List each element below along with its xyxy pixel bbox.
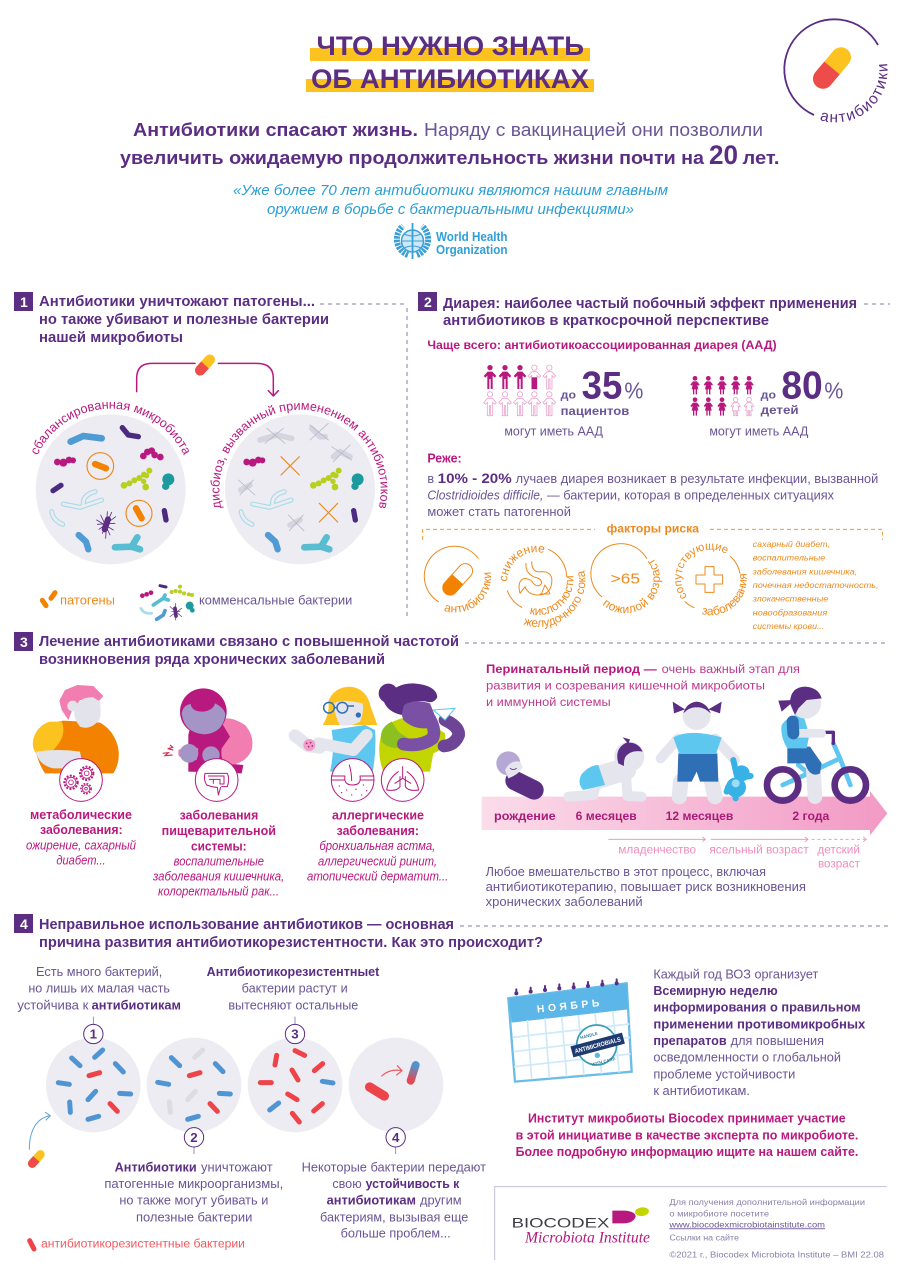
text: less often: — бактерии, которая в определенных ситуациях <box>547 489 835 503</box>
age stage labels <box>618 842 860 870</box>
step text 2: Антибиотики <box>115 1160 197 1174</box>
timeline labels: рождение <box>494 809 556 823</box>
title: ОБ АНТИБИОТИКАХ <box>311 64 589 94</box>
numbers: 2 <box>190 1130 198 1145</box>
stat: 35%: могут иметь ААД <box>504 424 603 438</box>
label: digestive: системы: <box>191 839 247 853</box>
step text 1: устойчива к <box>17 998 89 1012</box>
label: digestive: пищеварительной <box>162 824 276 838</box>
heading: section 1 <box>14 292 407 620</box>
text: intervention: Любое вмешательство в этот процесс, включая <box>486 865 766 879</box>
resistance steps <box>17 965 486 1251</box>
risk: elderly: >65 <box>611 571 640 587</box>
label: digestive <box>152 809 284 899</box>
panel: section 2 <box>418 292 890 631</box>
step text 4: свою <box>332 1177 362 1191</box>
step text 2: но также могут убивать и <box>119 1194 268 1208</box>
legend: патогены <box>60 592 115 607</box>
step text 3: Антибиотикорезистентныеt <box>207 965 380 979</box>
footer text: Ссылки на сайте <box>669 1232 739 1242</box>
figure: digestive <box>163 688 252 801</box>
risk: elderly <box>590 543 662 614</box>
text: awareness week <box>653 967 865 1098</box>
stat: 80%: могут иметь ААД <box>709 424 809 438</box>
step text 3: вытесняют остальные <box>228 998 358 1012</box>
icon: 35% patients <box>484 365 556 416</box>
intro text: лет. <box>742 147 780 168</box>
heading: section 4: причина развития антибиотикорезистентности. Как это происходит? <box>39 935 543 951</box>
step text 2: полезные бактерии <box>136 1210 252 1224</box>
text: awareness week: осведомленности о глобальной <box>653 1051 841 1065</box>
arc label: balanced microbiota: сбалансированная микробиота <box>32 402 189 456</box>
footer text: www.biocodexmicrobiotainstitute.com <box>668 1219 825 1229</box>
figure: allergies <box>295 683 459 801</box>
risk: reduced gastric acid <box>500 546 586 629</box>
text: intervention: хронических заболеваний <box>486 895 643 909</box>
panel: section 4 <box>14 914 888 1260</box>
quote: оружием в борьбе с бактериальными инфекциями» <box>267 202 634 218</box>
footer frame <box>495 1187 887 1260</box>
footer text: Для получения дополнительной информации <box>669 1197 865 1207</box>
microbiota diagram <box>32 354 388 622</box>
balanced microbiota circle <box>36 414 186 564</box>
subheading: AAD: Чаще всего: антибиотикоассоциированная диарея (ААД) <box>427 338 777 352</box>
legend: комменсальные бактерии <box>199 592 352 607</box>
icon: skin <box>331 759 374 801</box>
step text 4 <box>302 1160 486 1241</box>
legend <box>42 585 352 620</box>
step text 2: патогенные микроорганизмы, <box>104 1177 283 1191</box>
step text 1 <box>17 965 181 1012</box>
step text 2 <box>104 1160 283 1224</box>
timeline labels: 2 года <box>792 809 830 823</box>
risk: comorbidities: сопутствующие <box>675 544 728 599</box>
heading: section 2: Диарея: наиболее частый побочный эффект применения <box>443 296 857 312</box>
label: metabolic: диабет... <box>56 854 106 868</box>
figure: 2 years with bike <box>767 687 866 801</box>
arrow: pill to dish <box>29 1112 50 1149</box>
step text 4: антибиотикам <box>327 1194 416 1208</box>
intro text: Антибиотики спасают жизнь. <box>133 119 418 140</box>
step text 1: антибиотикам <box>92 998 181 1012</box>
quote: «Уже более 70 лет антибиотики являются нашим главным <box>233 183 668 199</box>
intro text: увеличить ожидаемую продолжительность жизни почти на <box>120 147 705 168</box>
figure: 12 months <box>661 702 751 798</box>
stat: 35% <box>504 363 643 438</box>
label: metabolic <box>26 808 136 868</box>
text: perinatal: очень важный этап для <box>662 662 800 676</box>
WHO logo: World Health <box>436 229 508 244</box>
dish 1 <box>46 1038 141 1132</box>
text: less often: в <box>427 472 434 486</box>
icon: 80% children <box>690 376 754 416</box>
stat: 35%: до <box>561 389 576 401</box>
step text 4: больше проблем... <box>341 1227 451 1241</box>
risk: comorbidities: заболевания <box>702 574 747 616</box>
timeline arrow <box>482 791 887 835</box>
text: less often: Clostridioides difficile, <box>427 489 543 503</box>
badge: antibiotics pill: антибиотики <box>820 64 888 122</box>
age stage labels: детский <box>817 842 860 856</box>
text: intervention: антибиотикотерапию, повышает риск возникновения <box>486 880 806 894</box>
stat: 80% <box>709 363 843 438</box>
footer text: ©2021 г., Biocodex Microbiota Institute – BMI 22.08 <box>669 1250 884 1260</box>
stat: 35%: пациентов <box>561 404 629 418</box>
comorbidities list: воспалительные <box>753 553 826 563</box>
icon: calendar <box>508 979 632 1082</box>
logo: Biocodex: Microbiota Institute <box>524 1229 650 1246</box>
stat: 35%: 35 <box>582 363 622 407</box>
dish 2 <box>147 1038 241 1132</box>
text: perinatal: развития и созревания кишечной микробиоты <box>486 679 765 693</box>
footer text: о микробиоте посетите <box>669 1208 769 1218</box>
comorbidities list: системы крови... <box>753 621 824 631</box>
heading: section 3 <box>14 632 888 668</box>
dish 4 <box>349 1038 443 1132</box>
stat: 80%: 80 <box>781 363 823 407</box>
logo: Biocodex <box>512 1207 650 1246</box>
timeline labels <box>494 809 830 823</box>
arc label: dysbiosis: дисбиоз, вызванный применением антибиотиков <box>210 403 388 508</box>
logo: Biocodex: BIOCODEX <box>512 1215 609 1230</box>
heading: section 1: нашей микробиоты <box>39 330 183 346</box>
numbers <box>90 1027 400 1145</box>
text: institute: Более подробную информацию ищите на нашем сайте. <box>516 1145 858 1159</box>
heading: section 4 <box>14 914 888 951</box>
label: allergies: аллергический ринит, <box>318 854 437 868</box>
title <box>306 31 594 94</box>
text: less often: может стать патогенной <box>427 505 571 519</box>
panel: section 3 <box>14 632 888 909</box>
age stage labels: младенчество <box>618 842 696 856</box>
icon: calendar: WITH CARE <box>591 1056 616 1067</box>
awareness week panel <box>495 967 887 1260</box>
icon: teddy bear <box>726 760 751 798</box>
risk: antibiotics <box>424 546 492 612</box>
text: institute: в этой инициативе в качестве эксперта по микробиоте. <box>516 1128 858 1142</box>
risk factors header <box>423 522 883 540</box>
text: awareness week: информирования о правильном <box>653 1001 861 1015</box>
heading: section 1: 1 <box>20 294 28 310</box>
heading: section 4: Неправильное использование антибиотиков — основная <box>39 917 454 933</box>
icon: calendar: НОЯБРЬ <box>536 998 600 1016</box>
step text 2: уничтожают <box>201 1160 273 1174</box>
intro text: Наряду с вакцинацией они позволили <box>424 119 763 140</box>
label: allergies: аллергические <box>332 809 424 823</box>
text: awareness week: к антибиотикам. <box>653 1084 750 1098</box>
step text 1: Есть много бактерий, <box>36 965 162 979</box>
text: less often: Реже: <box>427 451 462 465</box>
label: metabolic: метаболические <box>30 808 132 822</box>
text: awareness week: проблеме устойчивости <box>653 1067 795 1081</box>
comorbidities list: сахарный диабет, <box>753 539 830 549</box>
icon: gears <box>60 759 102 801</box>
intro text: 20 <box>709 140 738 170</box>
step text 4: бактериям, вызывая еще <box>320 1210 468 1224</box>
figure: metabolic <box>33 685 119 801</box>
text: perinatal <box>486 662 800 709</box>
timeline labels: 12 месяцев <box>666 809 733 823</box>
risk factors header: факторы риска <box>607 522 699 536</box>
stat: 35%: % <box>624 377 643 403</box>
numbers: 1 <box>90 1027 98 1042</box>
age stage labels: возраст <box>818 856 860 870</box>
step text 3: бактерии растут и <box>242 982 348 996</box>
risk: reduced gastric acid: желудочного сока <box>523 570 586 629</box>
label: digestive: воспалительные <box>174 854 264 868</box>
panel: section 1 <box>14 292 408 622</box>
icon: lungs <box>381 759 424 801</box>
comorbidities list: заболевания кишечника, <box>752 566 857 576</box>
stat: 80%: до <box>761 389 776 401</box>
heading: section 3: 3 <box>20 634 28 650</box>
heading: section 1: но также убивают и полезные бактерии <box>39 312 329 328</box>
quote <box>233 183 668 218</box>
step text 1: но лишь их малая часть <box>28 982 170 996</box>
number markers <box>84 1017 405 1154</box>
perinatal timeline <box>482 662 887 909</box>
numbers: 3 <box>291 1027 299 1042</box>
text: perinatal: Перинатальный период — <box>486 662 657 676</box>
arrow: from balanced to dysbiosis <box>137 363 278 396</box>
label: metabolic: ожирение, сахарный <box>26 838 136 852</box>
step text 4: Некоторые бактерии передают <box>302 1160 486 1174</box>
heading: section 3: Лечение антибиотиками связано с повышенной частотой <box>39 634 459 650</box>
risk: reduced gastric acid: снижение <box>500 546 544 581</box>
figure: 6 months <box>568 737 644 797</box>
intro text <box>120 119 780 170</box>
comorbidities list: новообразования <box>753 607 828 617</box>
label: allergies: заболевания: <box>337 824 419 838</box>
footer text <box>668 1197 884 1260</box>
text: awareness week: Всемирную неделю <box>653 984 778 998</box>
text: awareness week: препаратов <box>653 1034 727 1048</box>
label: digestive: заболевания <box>180 809 258 823</box>
text: perinatal: и иммунной системы <box>486 695 611 709</box>
comorbidities list: почечная недостаточность, <box>753 580 879 590</box>
text: intervention <box>486 865 806 909</box>
age stage arrows <box>608 837 866 842</box>
heading: section 2 <box>418 292 890 329</box>
icon: calendar: ANTIMICROBIALS <box>574 1036 622 1055</box>
title: ЧТО НУЖНО ЗНАТЬ <box>316 31 584 61</box>
icon: calendar: HANDLE <box>580 1031 598 1040</box>
text: awareness week: для повышения <box>731 1034 824 1048</box>
text: awareness week: Каждый год ВОЗ организует <box>653 967 819 981</box>
risk: elderly: пожилой возраст <box>602 560 662 614</box>
icon: pill <box>26 1148 47 1170</box>
text: awareness week: применении противомикробных <box>653 1017 865 1031</box>
label: allergies: атопический дерматит... <box>307 869 448 883</box>
risk: comorbidities <box>675 544 747 616</box>
stat: 80%: % <box>824 377 843 403</box>
label: digestive: заболевания кишечника, <box>152 869 284 883</box>
heading: section 3: возникновения ряда хронических заболеваний <box>39 652 385 668</box>
text: less often: 10% - 20% <box>438 470 512 486</box>
numbers: 4 <box>392 1130 400 1145</box>
heading: section 2: 2 <box>424 294 432 310</box>
heading: section 4: 4 <box>20 916 28 932</box>
icon: intestine <box>195 759 238 801</box>
stat: 80%: детей <box>761 403 799 417</box>
risk: reduced gastric acid: кислотности <box>530 576 574 615</box>
text: less often: лучаев диарея возникает в результате инфекции, вызванной <box>516 472 878 486</box>
label: allergies <box>307 809 448 883</box>
dish 3 <box>248 1038 342 1132</box>
step text 3 <box>207 965 380 1012</box>
label: allergies: бронхиальная астма, <box>319 839 435 853</box>
dysbiosis circle <box>225 414 375 564</box>
step text 4: устойчивость к <box>366 1177 460 1191</box>
chronic diseases <box>26 683 459 899</box>
risk: antibiotics: антибиотики <box>444 572 492 612</box>
icon: pill <box>193 352 217 378</box>
figure: newborn <box>496 751 534 790</box>
step text 4: другим <box>420 1194 462 1208</box>
heading: section 1: Антибиотики уничтожают патогены... <box>39 294 315 310</box>
heading: section 2: антибиотиков в краткосрочной перспективе <box>443 313 769 329</box>
text: institute: Институт микробиоты Biocodex принимает участие <box>528 1112 846 1126</box>
comorbidities list: злокачественные <box>752 594 829 604</box>
text: institute <box>516 1112 858 1159</box>
age stage labels: ясельный возраст <box>709 842 809 856</box>
diarrhea content <box>422 338 884 631</box>
legend: resistant bacteria: антибиотикорезистентные бактерии <box>41 1237 245 1251</box>
label: metabolic: заболевания: <box>40 823 123 837</box>
timeline labels: 6 месяцев <box>576 809 637 823</box>
WHO logo <box>397 223 508 259</box>
text: less often <box>427 451 878 519</box>
label: digestive: колоректальный рак... <box>158 885 279 899</box>
badge: antibiotics pill <box>783 18 888 122</box>
comorbidities list <box>752 539 879 631</box>
WHO logo: Organization <box>436 242 508 257</box>
